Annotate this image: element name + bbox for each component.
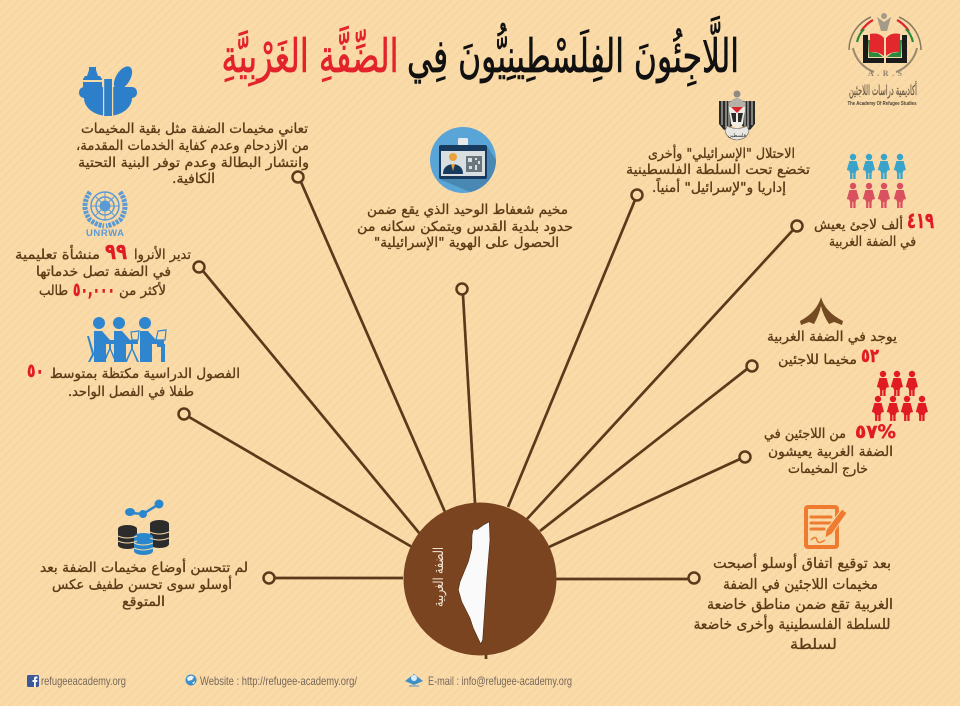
text: المتوقع bbox=[122, 594, 165, 610]
text: الحصول على الهوية "الإسرائيلية" bbox=[374, 235, 559, 251]
icon: tent bbox=[800, 297, 843, 325]
block: UNRWA bbox=[15, 192, 191, 301]
text bbox=[27, 360, 240, 400]
block: Oslo agreement bbox=[694, 507, 893, 653]
title bbox=[222, 15, 739, 87]
icon: Palestinian emblem bbox=[719, 90, 755, 140]
text: الضفة الغربية يعيشون bbox=[768, 444, 893, 460]
text: الغربية تقع ضمن مناطق خاضعة bbox=[707, 597, 893, 613]
text: تدير الأنروا bbox=[134, 246, 191, 263]
footer: contact links bbox=[27, 674, 572, 688]
title: red part: الضِّفَّةِ الغَرْبِيَّةِ bbox=[222, 25, 398, 87]
text bbox=[626, 144, 810, 196]
block: Shuafat camp bbox=[357, 127, 573, 251]
block: 57 percent bbox=[764, 371, 928, 477]
text: للسلطة الفلسطينية وأخرى خاضعة bbox=[694, 614, 890, 633]
text: %٥٧ bbox=[855, 421, 896, 443]
text bbox=[764, 421, 896, 477]
website: Website : http://refugee-academy.org/ bbox=[200, 674, 358, 688]
icon: students at desks bbox=[87, 317, 166, 362]
text: إداريا و"لإسرائيل" أمنياً. bbox=[652, 177, 786, 196]
text bbox=[814, 209, 934, 250]
text: لسلطة bbox=[790, 637, 837, 653]
icon: document and pen bbox=[806, 507, 847, 547]
text: من اللاجئين في bbox=[764, 426, 846, 442]
text: تعاني مخيمات الضفة مثل بقية المخيمات bbox=[81, 121, 308, 137]
logo: Academy of Refugee Studies bbox=[848, 13, 921, 107]
text: من الازدحام وعدم كفاية الخدمات المقدمة، bbox=[76, 138, 309, 154]
block: crowded classrooms bbox=[27, 317, 240, 400]
text: ٥٠,٠٠٠ bbox=[73, 279, 115, 301]
connector rays bbox=[178, 172, 802, 659]
block: occupation and authority bbox=[626, 90, 810, 196]
icon: map of Palestine bbox=[458, 522, 490, 644]
text: طفلا في الفصل الواحد. bbox=[68, 384, 194, 400]
text: لم تتحسن أوضاع مخيمات الضفة بعد bbox=[40, 558, 248, 576]
facebook: refugeeacademy.org bbox=[41, 674, 126, 688]
facebook bbox=[27, 674, 126, 688]
text: مخيم شعفاط الوحيد الذي يقع ضمن bbox=[367, 202, 568, 218]
text: بعد توقيع اتفاق أوسلو أصبحت bbox=[713, 553, 891, 572]
icon: ID badge bbox=[430, 127, 496, 193]
hub label: الضفة الغربية bbox=[431, 547, 447, 607]
text: يوجد في الضفة الغربية bbox=[767, 329, 897, 345]
text bbox=[40, 558, 248, 610]
email: E-mail : info@refugee-academy.org bbox=[428, 674, 572, 688]
logo: Academy of Refugee Studies: The Academy Of Refugee Studies bbox=[848, 101, 917, 107]
text: الاحتلال "الإسرائيلي" وأخرى bbox=[648, 144, 795, 162]
UNRWA wordmark: UNRWA bbox=[86, 228, 124, 239]
text: الفصول الدراسية مكتظة بمتوسط bbox=[50, 366, 240, 382]
text: ٤١٩ bbox=[907, 209, 934, 234]
title: black part: اللَّاجِئُونَ الفِلَسْطِينِيُّونَ فِي bbox=[407, 15, 739, 87]
logo: Academy of Refugee Studies: A.R.S bbox=[868, 69, 903, 78]
text: في الضفة الغربية bbox=[829, 234, 916, 250]
icon: coins and chart bbox=[118, 500, 169, 555]
block: 52 camps bbox=[767, 297, 897, 368]
text: مخيما للاجئين bbox=[778, 352, 857, 368]
text: خارج المخيمات bbox=[788, 461, 868, 477]
central hub with map bbox=[404, 502, 556, 656]
block: services in camps bbox=[76, 63, 309, 187]
text: الكافية. bbox=[172, 171, 215, 187]
block: 419 thousand refugees bbox=[814, 154, 934, 250]
text bbox=[694, 553, 893, 653]
text bbox=[15, 240, 191, 301]
text: ٩٩ bbox=[105, 240, 127, 265]
icon: people in blue and pink bbox=[847, 154, 906, 208]
icon: UN emblem bbox=[85, 192, 125, 226]
text bbox=[767, 329, 897, 368]
email bbox=[405, 674, 572, 688]
text: لأكثر من bbox=[119, 282, 166, 299]
text: طالب bbox=[39, 283, 68, 299]
text: وانتشار البطالة وعدم توفر البنية التحتية bbox=[78, 155, 309, 171]
text: في الضفة تصل خدماتها bbox=[36, 264, 171, 280]
text bbox=[76, 121, 309, 187]
icon: red people bbox=[872, 371, 928, 421]
text: منشأة تعليمية bbox=[15, 245, 100, 263]
icon: food basket bbox=[79, 63, 137, 116]
text: ألف لاجئ يعيش bbox=[814, 215, 903, 233]
text bbox=[357, 202, 573, 251]
text: تخضع تحت السلطة الفلسطينية bbox=[626, 162, 810, 178]
block: Oslo no improvement bbox=[40, 500, 248, 610]
text: أوسلو سوى تحسن طفيف عكس bbox=[52, 575, 232, 593]
icon: Palestinian emblem: فلسطين bbox=[728, 133, 747, 139]
text: ٥٢ bbox=[861, 345, 879, 367]
text: ٥٠ bbox=[27, 360, 44, 382]
text: حدود بلدية القدس ويتمكن سكانه من bbox=[357, 219, 573, 235]
text: مخيمات اللاجئين في الضفة bbox=[723, 577, 878, 593]
